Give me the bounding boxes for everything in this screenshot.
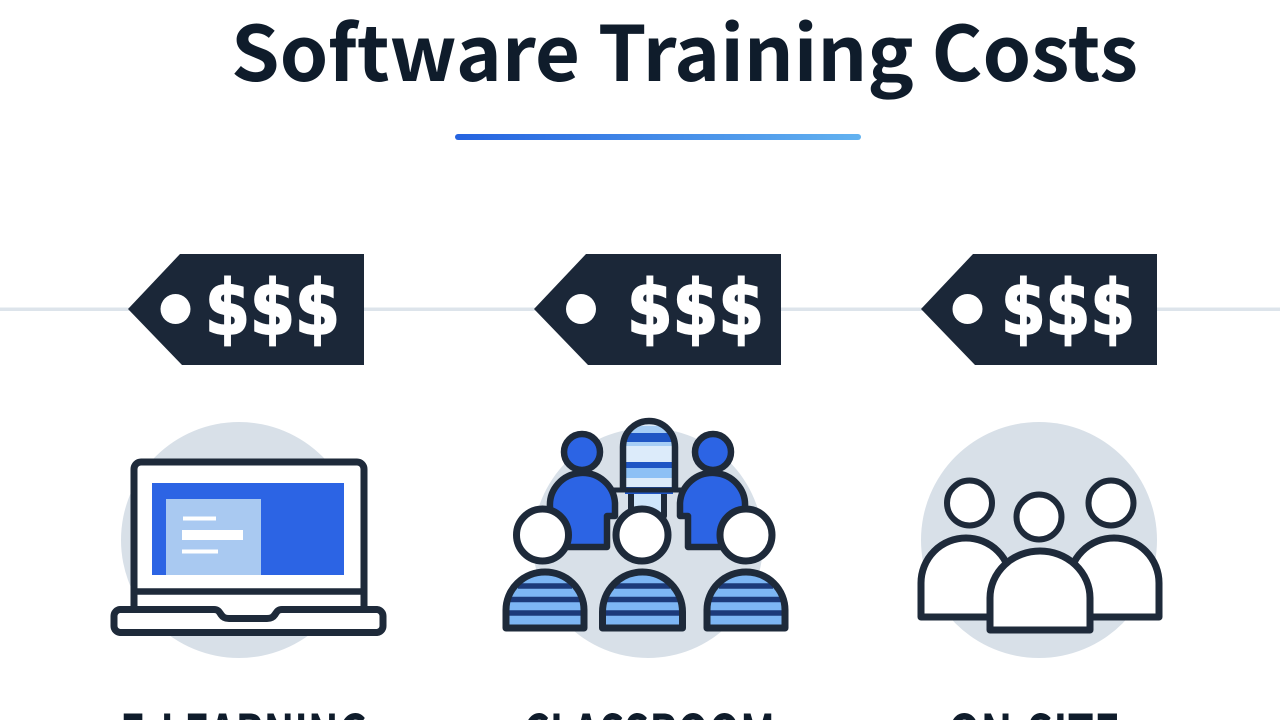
presenter: [612, 421, 684, 516]
icon: laptop: [114, 422, 383, 658]
front student middle: [602, 572, 682, 628]
price tag: classroom: $$$: [627, 263, 764, 352]
back left student: [550, 434, 615, 547]
front student heads: [516, 509, 772, 561]
price tag: on-site: [921, 254, 1157, 365]
title underline: [455, 134, 861, 140]
back right student: [680, 434, 745, 547]
price tag: e-learning: $$$: [205, 263, 340, 352]
front student right: [707, 572, 785, 628]
icon: classroom group: [506, 421, 785, 658]
price tag: on-site: $$$: [1001, 263, 1135, 352]
front student left: [506, 572, 584, 628]
price tag: e-learning: [128, 254, 364, 365]
price tag: classroom: [534, 254, 781, 365]
icon: on-site group: [921, 422, 1159, 658]
